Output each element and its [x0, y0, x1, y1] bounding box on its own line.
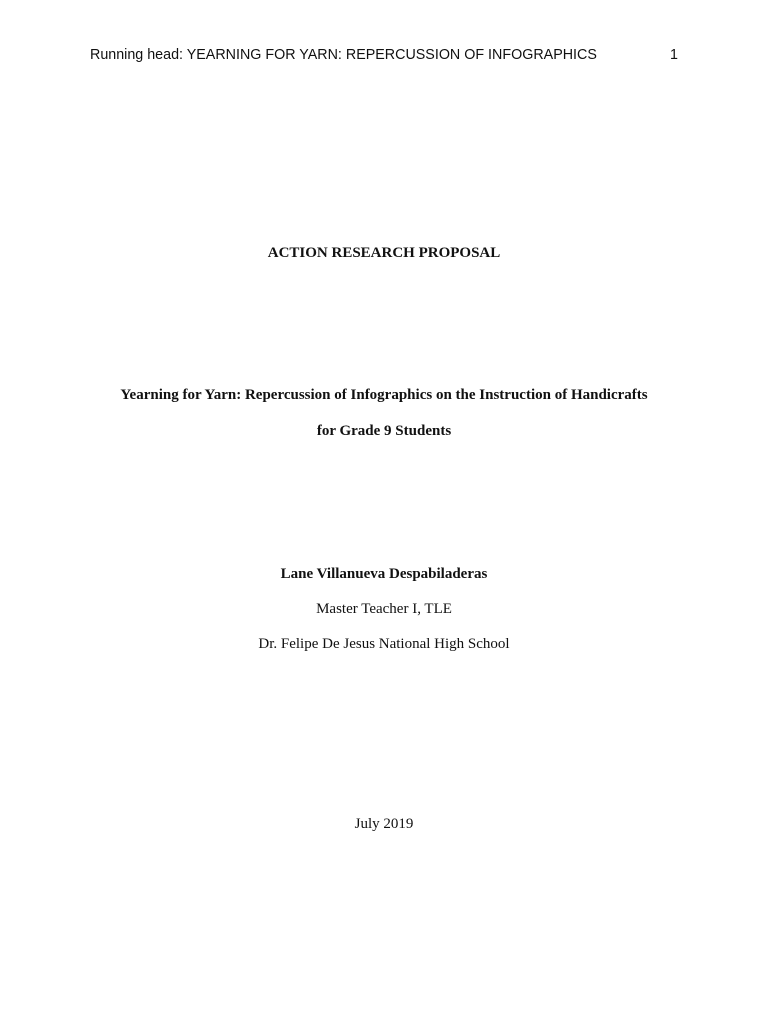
running head: Running head: YEARNING FOR YARN: REPERCUSSION OF INFOGRAPHICS: [90, 47, 597, 63]
title: for Grade 9 Students: [317, 423, 451, 439]
author name: Lane Villanueva Despabiladeras: [281, 566, 487, 582]
heading: action research proposal: ACTION RESEARCH PROPOSAL: [268, 245, 500, 261]
school: Dr. Felipe De Jesus National High School: [258, 636, 510, 652]
running head: 1: [670, 47, 678, 63]
date: July 2019: [355, 816, 413, 832]
author position: Master Teacher I, TLE: [316, 601, 452, 617]
title: [120, 387, 648, 439]
title: Yearning for Yarn: Repercussion of Infographics on the Instruction of Handicrafts: [120, 387, 648, 403]
